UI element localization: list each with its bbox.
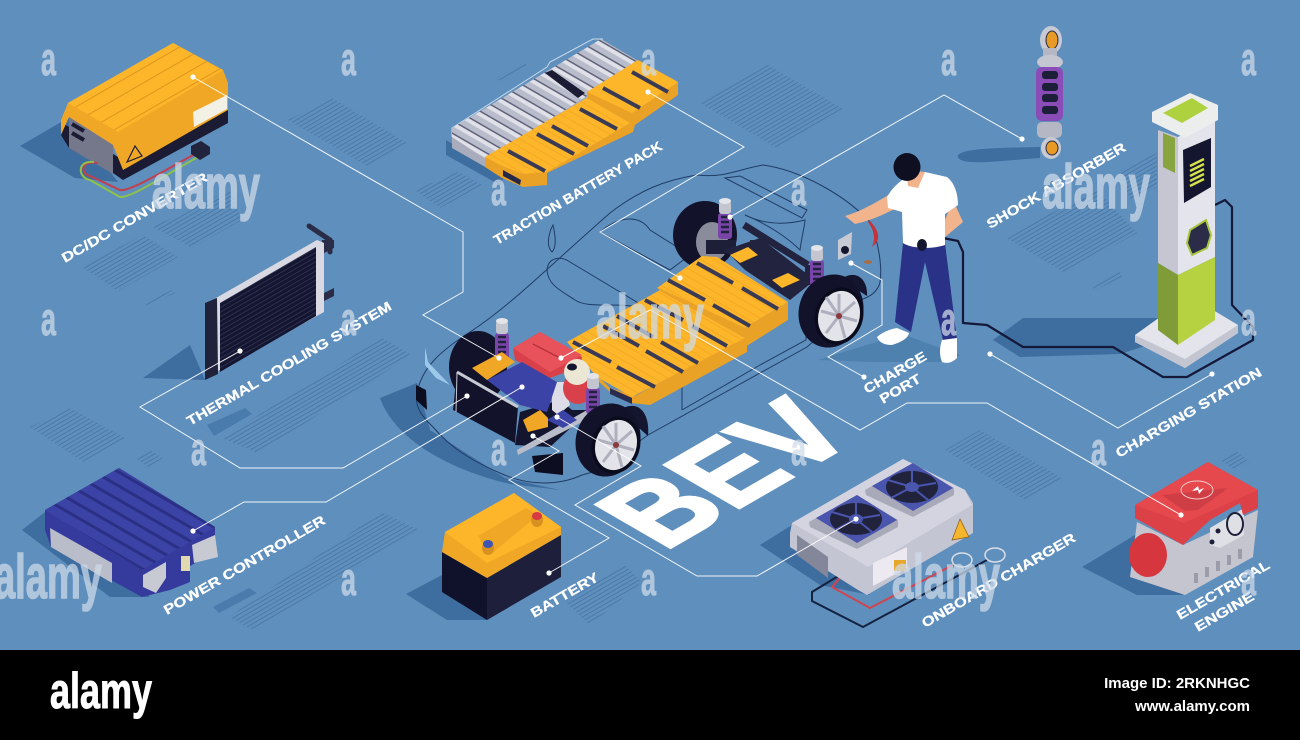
connector: electrical engine — [561, 310, 1181, 515]
labels — [59, 138, 1272, 635]
label: DC/DC converter: DC/DC CONVERTER — [59, 169, 211, 266]
panel: car shadow — [380, 383, 560, 490]
watermark letters: a — [791, 163, 806, 215]
watermark letters: a — [41, 293, 56, 345]
watermark letters: a — [791, 423, 806, 475]
footer bar — [0, 650, 1300, 740]
connector: shock absorber — [730, 95, 1022, 217]
front components — [416, 332, 593, 475]
label: onboard charger: ONBOARD CHARGER — [919, 530, 1078, 631]
rear left wheel — [673, 201, 737, 269]
connector: charging station — [990, 354, 1212, 428]
watermark letters — [41, 33, 1256, 605]
connector: onboard charger — [557, 417, 856, 576]
label: thermal cooling system: THERMAL COOLING SYSTEM — [184, 299, 394, 429]
panel: onboard charger — [760, 459, 1005, 627]
connector: power controller — [193, 387, 522, 531]
front right shock — [586, 373, 600, 414]
connector lines — [140, 77, 1212, 576]
front left wheel — [449, 331, 507, 403]
watermark words: alamy — [1042, 153, 1150, 222]
label: power controller: POWER CONTROLLER — [161, 512, 328, 618]
rear shock — [718, 198, 732, 239]
main battery plate — [567, 256, 788, 405]
charging cable — [943, 200, 1253, 377]
station shadow — [993, 318, 1158, 357]
connector end dots — [190, 74, 1215, 576]
watermark letters: a — [941, 293, 956, 345]
charge port on car — [838, 221, 878, 264]
watermark letters: a — [641, 553, 656, 605]
connector: charge port — [828, 263, 882, 377]
label: shock absorber: SHOCK ABSORBER — [984, 139, 1129, 232]
shadow under man — [818, 335, 960, 362]
label: traction battery pack: TRACTION BATTERY PACK — [491, 138, 665, 248]
car chassis — [416, 198, 873, 485]
connector: traction pack — [600, 92, 744, 278]
watermark letters: a — [941, 33, 956, 85]
watermark letters: a — [341, 553, 356, 605]
panel: charging station — [1135, 93, 1238, 368]
watermark letters: a — [641, 33, 656, 85]
panel: electrical engine — [1082, 462, 1258, 595]
label: electrical engine line 1: ELECTRICAL — [1174, 557, 1272, 623]
watermark letters: a — [1091, 423, 1106, 475]
heading placeholder bars — [207, 408, 257, 613]
front left shock — [495, 318, 509, 359]
watermark words — [0, 153, 1150, 612]
car outline — [417, 165, 881, 483]
watermark words: alamy — [596, 283, 704, 352]
connector: battery — [509, 436, 609, 573]
panel: 12V battery — [406, 493, 561, 620]
label: charge port line 1: CHARGE — [861, 349, 929, 397]
label: battery: BATTERY — [528, 570, 601, 621]
footer url: www.alamy.com — [1134, 698, 1250, 715]
footer image id: Image ID: 2RKNHGC — [1104, 675, 1250, 692]
rear right shock — [810, 245, 824, 286]
panel: shock absorber — [958, 26, 1063, 162]
watermark letters: a — [341, 293, 356, 345]
panel: thermal cooling system — [143, 226, 334, 380]
label: charge port line 2: PORT — [877, 371, 924, 407]
front right wheel — [566, 395, 650, 485]
watermark words: alamy — [892, 543, 1000, 612]
title: BEV: BEV — [568, 382, 883, 565]
watermark letters: a — [1241, 33, 1256, 85]
panel: traction battery pack — [446, 39, 678, 187]
panel: DC/DC converter — [20, 43, 228, 197]
watermark letters: a — [341, 33, 356, 85]
rear right wheel — [789, 266, 873, 356]
label: electrical engine line 2: ENGINE — [1192, 589, 1257, 635]
watermark letters: a — [41, 33, 56, 85]
watermark letters: a — [1241, 293, 1256, 345]
panel: power controller — [22, 468, 218, 597]
rear frame — [725, 225, 815, 300]
connector: thermal cooling — [140, 351, 467, 468]
watermark letters: a — [491, 163, 506, 215]
connector: DC/DC converter — [193, 77, 499, 358]
description text blocks (illegible microtext) — [30, 62, 1250, 630]
watermark letters: a — [1241, 553, 1256, 605]
footer logo: alamy — [50, 663, 152, 719]
man charging the car — [845, 153, 963, 363]
watermark words: alamy — [152, 153, 260, 222]
watermark letters: a — [491, 423, 506, 475]
watermark letters: a — [191, 423, 206, 475]
label: charging station: CHARGING STATION — [1113, 365, 1264, 461]
